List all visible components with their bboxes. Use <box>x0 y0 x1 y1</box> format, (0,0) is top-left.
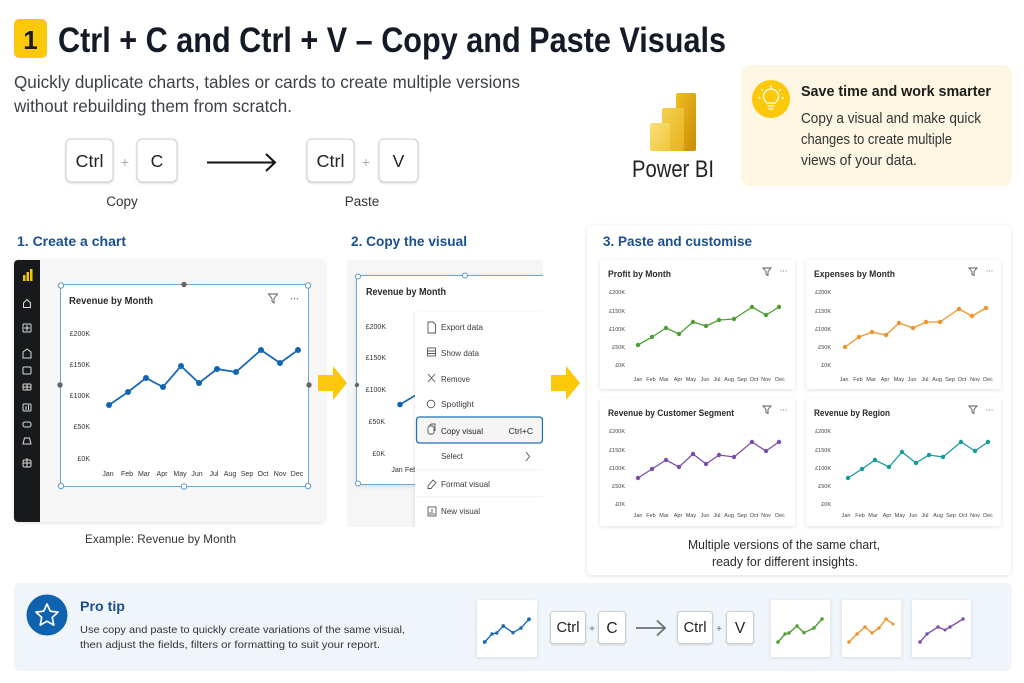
pro tip text <box>80 598 405 651</box>
chart behind the menu: Jan <box>391 467 403 474</box>
chart card: revenue by customer segment: Aug <box>724 513 734 519</box>
chart card: profit by month: Jan <box>634 377 642 383</box>
subtitle <box>13 72 520 116</box>
heading: step 3: 3. Paste and customise <box>603 233 752 249</box>
chart card: revenue by region: Apr <box>883 513 891 519</box>
pro tip text: then adjust the fields, filters or formatting to suit your report. <box>80 639 380 651</box>
chart card: revenue by customer segment: Jun <box>701 513 709 519</box>
thumbnail: purple chart <box>912 600 971 657</box>
chart card: revenue by customer segment: Feb <box>646 513 656 519</box>
thumbnail: blue chart <box>477 600 537 657</box>
chart card: revenue by region: Jun <box>909 513 917 519</box>
thumbnail: green chart <box>771 600 830 657</box>
x axis labels: Apr <box>157 471 168 478</box>
callout: save time: Save time and work smarter <box>801 83 991 100</box>
sidebar <box>14 260 40 522</box>
chart card: profit by month: Mar <box>659 377 669 383</box>
chart card: revenue by region: £150K <box>815 448 831 454</box>
y axis labels: £150K <box>70 362 90 369</box>
menu item: copy visual highlighted: Ctrl+C <box>509 426 533 436</box>
chart card: revenue by customer segment: £200K <box>609 429 625 435</box>
paste label: Paste <box>345 194 379 209</box>
key combo: paste <box>307 139 418 182</box>
caption: multiple versions: ready for different insights. <box>712 555 858 569</box>
menu item: remove: Remove <box>441 374 470 384</box>
chart: revenue by month <box>57 282 312 489</box>
key combo: copy small: + <box>589 624 595 635</box>
callout: save time <box>741 65 1012 186</box>
chart card: expenses by month: Mar <box>866 377 876 383</box>
number badge <box>14 19 47 58</box>
chart title: Revenue by Month <box>69 295 153 307</box>
chart behind the menu: Revenue by Month <box>366 286 446 298</box>
chart card: revenue by customer segment: Jan <box>634 513 642 519</box>
chart card: revenue by customer segment: £100K <box>609 466 625 472</box>
icon: star <box>26 594 68 636</box>
subtitle: Quickly duplicate charts, tables or cards to create multiple versions <box>14 72 520 92</box>
heading text: Ctrl + C and Ctrl + V – Copy and Paste Visuals <box>58 21 726 60</box>
menu item: remove <box>428 374 470 384</box>
x axis labels: Oct <box>258 471 268 478</box>
number badge: 1 <box>23 25 38 55</box>
chart card: expenses by month: £150K <box>815 309 831 315</box>
menu item: spotlight: Spotlight <box>441 399 475 409</box>
chart card: revenue by region: Oct <box>959 513 968 519</box>
chart card: revenue by customer segment: Oct <box>750 513 759 519</box>
chart behind the menu: £200K <box>366 324 386 331</box>
key combo: copy small: C <box>606 620 618 637</box>
icon: light bulb <box>752 80 790 118</box>
chart behind the menu: Feb <box>405 467 417 474</box>
chart card: revenue by region: Sep <box>946 513 956 519</box>
chart behind the menu: £150K <box>366 355 386 362</box>
chart card: revenue by region: Jan <box>842 513 850 519</box>
callout: save time: changes to create multiple <box>801 132 952 148</box>
icon: more <box>291 298 298 299</box>
caption: multiple versions <box>688 538 880 569</box>
chart card: expenses by month: Feb <box>853 377 863 383</box>
panel: step 3 paste and customise <box>587 225 1011 575</box>
chart card: expenses by month: £100K <box>815 327 831 333</box>
chart card: profit by month: Profit by Month <box>608 269 671 280</box>
x axis labels: Jan <box>102 471 114 478</box>
chart card: revenue by customer segment: £0K <box>615 502 625 508</box>
title <box>14 19 726 60</box>
chart card: expenses by month: £50K <box>818 345 831 351</box>
key combo: copy: Ctrl <box>76 151 104 171</box>
y axis labels: £200K <box>70 331 90 338</box>
chart card: profit by month: Jun <box>701 377 709 383</box>
context menu <box>415 312 543 527</box>
key combo: paste small: V <box>735 620 746 637</box>
menu item: copy visual highlighted: Copy visual <box>441 426 483 436</box>
chart card: revenue by customer segment: Revenue by Customer Segment <box>608 408 735 419</box>
x axis labels <box>102 471 304 478</box>
chart card: revenue by region: £0K <box>821 502 831 508</box>
menu item: select <box>441 451 530 461</box>
key combo: copy: C <box>151 151 163 171</box>
key combo: copy small: Ctrl <box>556 620 580 636</box>
Power BI logo: Power BI <box>632 156 714 183</box>
sidebar icons <box>23 300 31 467</box>
pro tip text: Use copy and paste to quickly create variations of the same visual, <box>80 624 405 636</box>
chart card: revenue by region: Jul <box>921 513 929 519</box>
chart card: revenue by region: Mar <box>868 513 878 519</box>
chart card: revenue by customer segment: Dec <box>775 513 785 519</box>
chart card: revenue by region: Dec <box>983 513 993 519</box>
chart card: revenue by region: Nov <box>970 513 980 519</box>
panel: pro tip <box>14 583 1012 671</box>
heading: step 1: 1. Create a chart <box>17 233 126 249</box>
x axis labels: May <box>173 471 187 478</box>
chart card: expenses by month: £200K <box>815 290 831 296</box>
chart behind the menu: £0K <box>373 451 385 458</box>
chart card: revenue by customer segment: Jul <box>713 513 721 519</box>
x axis labels: Mar <box>138 471 151 478</box>
chart card: expenses by month: £0K <box>821 363 831 369</box>
x axis labels: Nov <box>274 471 287 478</box>
chart card: revenue by customer segment: Apr <box>674 513 682 519</box>
callout: save time: views of your data. <box>801 153 917 169</box>
shortcut diagram: copy and paste keys <box>66 139 418 209</box>
thumbnail: orange chart <box>842 600 901 657</box>
chart card: revenue by customer segment: Sep <box>737 513 747 519</box>
x axis labels: Aug <box>224 471 236 478</box>
chart behind the menu: £50K <box>369 419 385 426</box>
chart card: revenue by region: £50K <box>818 484 831 490</box>
chart card: expenses by month: Nov <box>970 377 980 383</box>
x axis labels: Jul <box>210 471 219 478</box>
chart card: profit by month: Jul <box>713 377 721 383</box>
line series <box>106 347 301 408</box>
chart card: profit by month: £200K <box>609 290 625 296</box>
chart card: revenue by customer segment: Mar <box>659 513 669 519</box>
chart behind the menu <box>355 273 556 486</box>
selection handles <box>57 282 312 489</box>
chart card: expenses by month: Jul <box>921 377 929 383</box>
y axis labels: £0K <box>78 456 90 463</box>
y axis labels: £50K <box>74 424 90 431</box>
arrow: copy to paste <box>207 154 275 171</box>
chart behind the menu: £100K <box>366 387 386 394</box>
heading: step 2: 2. Copy the visual <box>351 233 467 249</box>
menu item: show data: Show data <box>441 348 479 358</box>
y axis labels <box>70 331 90 463</box>
chart card: profit by month: £50K <box>612 345 625 351</box>
chart card: profit by month: £0K <box>615 363 625 369</box>
key combo: paste: Ctrl <box>316 151 344 171</box>
chart card: expenses by month: Jun <box>908 377 916 383</box>
arrow: step 1 to 2 <box>318 366 347 400</box>
arrow: step 2 to 3 <box>551 366 580 400</box>
menu item: format visual: Format visual <box>441 479 490 489</box>
chart card: revenue by region <box>806 399 1001 526</box>
chart card: profit by month: Aug <box>724 377 734 383</box>
icon: Power BI mini logo <box>23 269 32 281</box>
chart card: revenue by region: May <box>895 513 905 519</box>
menu item: export data: Export data <box>441 322 483 332</box>
chart card: revenue by customer segment: May <box>686 513 696 519</box>
pro tip text: Pro tip <box>80 598 125 614</box>
chart card: expenses by month: Oct <box>958 377 967 383</box>
chart card: profit by month: Nov <box>761 377 771 383</box>
chart card: revenue by customer segment: Nov <box>761 513 771 519</box>
panel: step 2 copy the visual <box>347 260 556 527</box>
chart card: profit by month: Dec <box>775 377 785 383</box>
chart card: revenue by customer segment: £150K <box>609 448 625 454</box>
x axis labels: Feb <box>121 471 133 478</box>
chart card: revenue by region: Aug <box>933 513 943 519</box>
chart card: revenue by region: Feb <box>855 513 865 519</box>
chart card: profit by month: Oct <box>750 377 759 383</box>
icon: filter <box>268 294 278 303</box>
chart card: revenue by customer segment <box>600 399 795 526</box>
key combo: paste: V <box>393 151 405 171</box>
key combo: paste small <box>678 612 754 644</box>
chart card: expenses by month <box>806 260 1001 389</box>
key combo: copy: + <box>121 154 129 170</box>
menu item: new visual: New visual <box>441 506 480 516</box>
copy label: Copy <box>106 194 138 209</box>
chart card: expenses by month: Apr <box>881 377 889 383</box>
caption: example: Example: Revenue by Month <box>85 532 236 546</box>
chart card: profit by month: Feb <box>646 377 656 383</box>
chart card: expenses by month: Sep <box>945 377 955 383</box>
chart card: expenses by month: Aug <box>932 377 942 383</box>
chart card: profit by month: £100K <box>609 327 625 333</box>
panel: step 1 create a chart <box>14 260 325 522</box>
y axis labels: £100K <box>70 393 90 400</box>
key combo: copy small <box>550 612 626 644</box>
menu item: export data <box>428 322 483 333</box>
chart card: revenue by customer segment: £50K <box>612 484 625 490</box>
chart card: profit by month: £150K <box>609 309 625 315</box>
chart card: expenses by month: May <box>894 377 904 383</box>
chart card: profit by month: May <box>686 377 696 383</box>
chart card: expenses by month: Dec <box>983 377 993 383</box>
chart card: expenses by month: Expenses by Month <box>814 269 895 280</box>
chart card: revenue by region: £100K <box>815 466 831 472</box>
menu item: spotlight <box>427 399 475 409</box>
key combo: paste: + <box>362 154 370 170</box>
chart card: revenue by region: Revenue by Region <box>814 408 890 419</box>
key combo: copy <box>66 139 177 182</box>
callout: save time: Copy a visual and make quick <box>801 111 982 127</box>
arrow: small <box>636 620 665 636</box>
x axis labels: Sep <box>241 471 253 478</box>
menu item: copy visual highlighted <box>416 417 542 443</box>
Power BI logo <box>632 93 714 183</box>
subtitle: without rebuilding them from scratch. <box>13 96 292 116</box>
chart card: profit by month: Apr <box>674 377 682 383</box>
x axis labels: Dec <box>291 471 304 478</box>
chart card: profit by month <box>600 260 795 389</box>
key combo: paste small: Ctrl <box>684 620 706 636</box>
key combo: paste small: + <box>716 624 722 635</box>
x axis labels: Jun <box>191 471 203 478</box>
caption: multiple versions: Multiple versions of the same chart, <box>688 538 880 552</box>
chart card: expenses by month: Jan <box>840 377 848 383</box>
chart card: profit by month: Sep <box>737 377 747 383</box>
menu item: select: Select <box>441 451 464 461</box>
chart card: revenue by region: £200K <box>815 429 831 435</box>
